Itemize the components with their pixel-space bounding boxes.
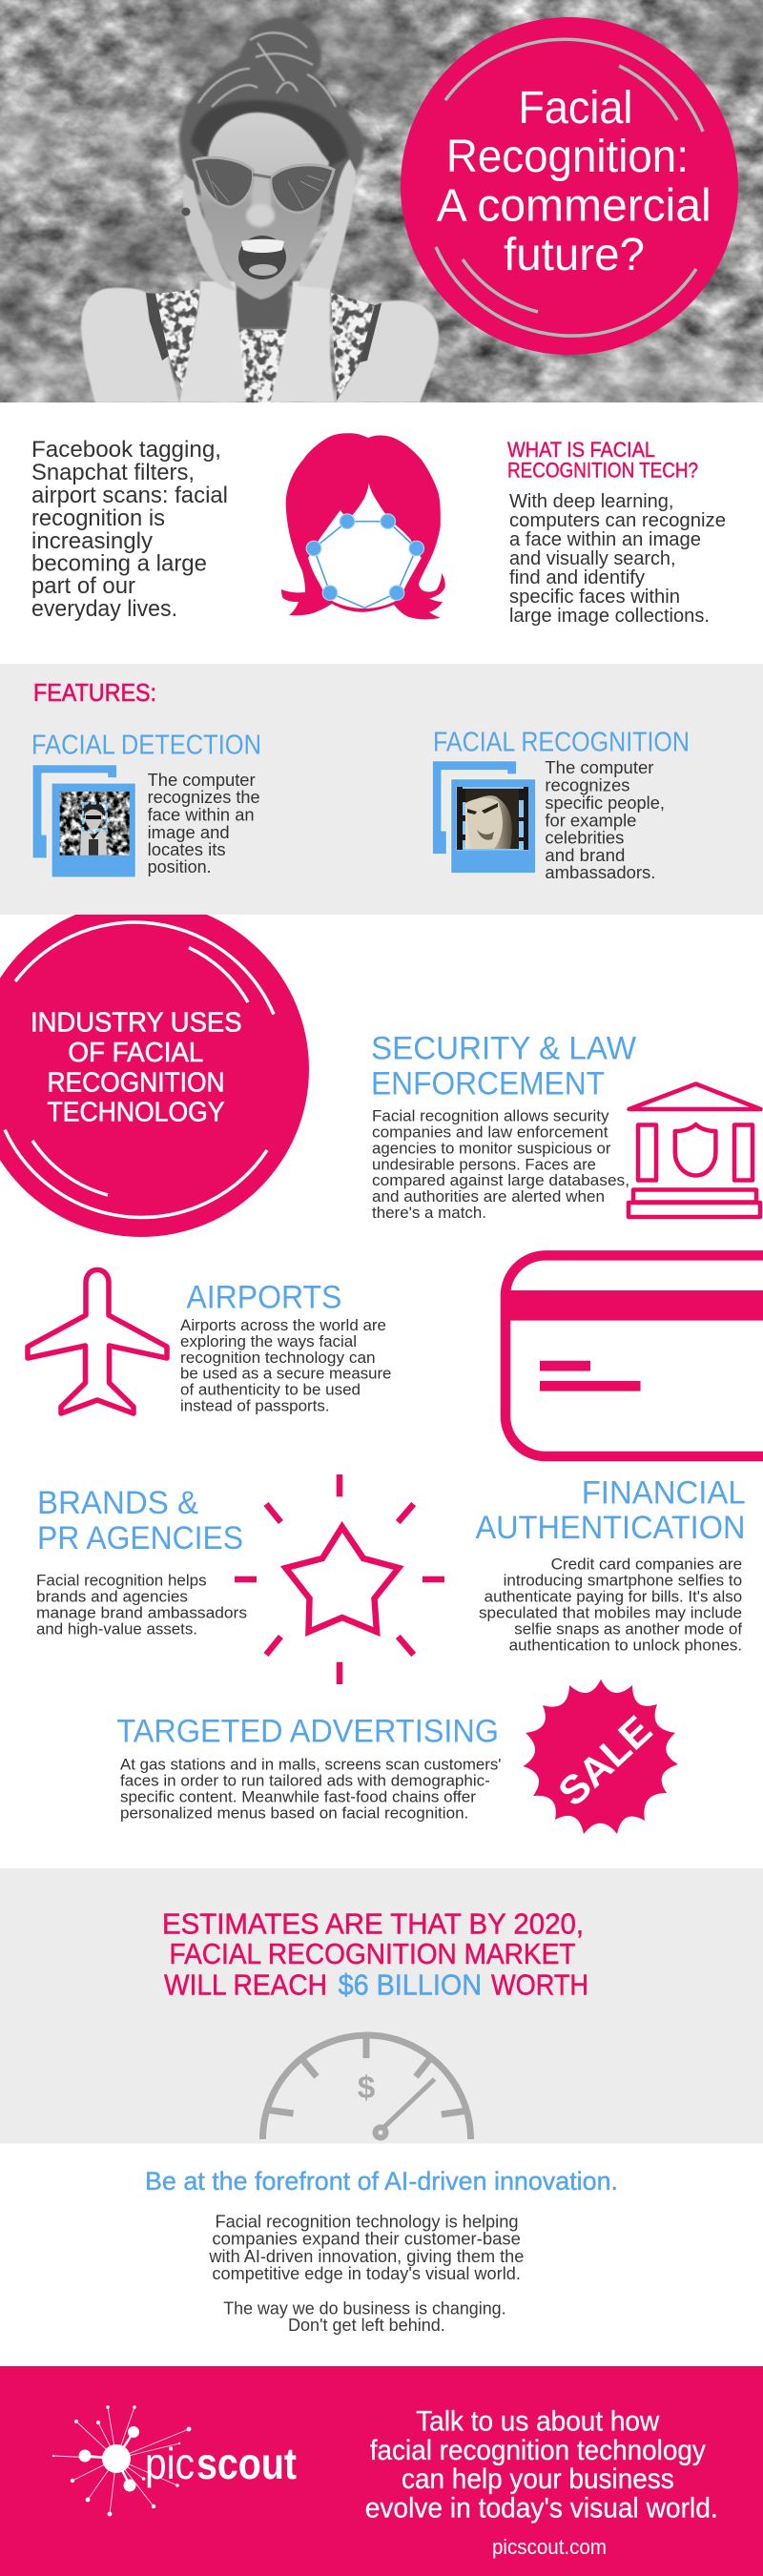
airports text: instead of passports. [180,1397,330,1414]
decorative white arcs [5,922,274,1217]
earring [181,208,191,216]
market estimate heading [162,1907,588,2001]
call to action text [208,2211,524,2335]
icon: government building with shield [629,1083,761,1217]
security and law enforcement heading: SECURITY & LAW [371,1031,636,1067]
logo: picscout [52,2405,297,2516]
intro paragraph: Facebook tagging, [31,437,221,463]
brands text: brands and agencies [36,1589,188,1606]
recognition text: celebrities [545,828,624,847]
hero title circle [401,17,738,355]
what is facial recognition text [509,491,726,627]
market estimate heading: ESTIMATES ARE THAT BY 2020, [162,1907,584,1941]
detection text: face within an [148,805,255,824]
what is facial recognition heading: RECOGNITION TECH? [507,458,698,483]
market estimate heading: $6 BILLION [339,1968,482,2001]
what is facial recognition text: With deep learning, [509,491,673,512]
security text: Facial recognition allows security [372,1108,609,1125]
market estimate heading: WORTH [491,1968,588,2001]
icon: detection photo frames [32,765,135,877]
security text: there's a match. [372,1205,486,1222]
targeted advertising text: faces in order to run tailored ads with demographic- [120,1773,490,1790]
financial text: authenticate paying for bills. It's also [485,1589,742,1606]
film strip sides [457,787,528,850]
what is facial recognition text: large image collections. [509,606,710,627]
nose and mouth [238,179,286,279]
logo: picscout: pic [145,2439,195,2488]
financial authentication heading: AUTHENTICATION [475,1510,746,1546]
icon: hair and face with detection points [281,433,445,619]
icon: dollar gauge [263,2035,471,2139]
recognition text: for example [545,811,636,830]
airports text: of authenticity to be used [180,1381,361,1398]
market estimate heading: FACIAL RECOGNITION MARKET [170,1937,576,1970]
recognition text: recognizes [545,776,629,795]
what is facial recognition heading [507,438,698,483]
targeted advertising text [120,1757,502,1822]
title: A commercial [437,181,711,231]
recognition text: ambassadors. [545,863,655,882]
recognition text: and brand [545,846,625,865]
what is facial recognition text: specific faces within [509,587,680,608]
title [437,83,711,280]
footer call to action: Talk to us about how [416,2406,659,2438]
dress pattern [155,289,375,402]
forearms [179,281,335,402]
features heading: FEATURES: [33,678,156,707]
hands [183,159,356,291]
icon: star with rays [235,1474,444,1684]
detection text: locates its [148,840,226,859]
financial text: Credit card companies are [551,1556,742,1574]
icon: sale burst [523,1680,678,1834]
footer call to action: facial recognition technology [370,2435,706,2466]
detection text: image and [148,823,230,842]
industry uses heading: OF FACIAL [68,1038,203,1068]
footer call to action: can help your business [402,2463,674,2495]
call to action text: Facial recognition technology is helping [216,2211,519,2232]
targeted advertising heading: TARGETED ADVERTISING [116,1714,499,1750]
title: Facial [518,83,632,134]
title: future? [504,230,645,280]
airports heading: AIRPORTS [186,1279,341,1315]
security text [372,1108,629,1222]
industry uses circle [0,901,309,1237]
intro paragraph: everyday lives. [31,596,177,622]
detection text: The computer [148,771,256,790]
industry uses heading: TECHNOLOGY [48,1098,225,1128]
brands and pr agencies heading: PR AGENCIES [37,1520,243,1556]
recognition text: The computer [545,758,653,777]
dress straps [146,293,382,362]
financial text [479,1556,743,1654]
airports text: recognition technology can [180,1350,376,1367]
icon: airplane [28,1270,167,1413]
call to action text: with AI-driven innovation, giving them the [208,2246,524,2266]
neck shadow [236,286,289,329]
icon: credit card [501,1255,763,1456]
footer call to action [365,2406,718,2524]
detection text [148,771,260,876]
intro paragraph: part of our [31,573,135,599]
icon: dollar gauge: $ [358,2070,375,2105]
security text: companies and law enforcement [372,1123,608,1141]
call to action text: competitive edge in today's visual world. [212,2263,521,2283]
brands text [36,1573,247,1638]
financial text: selfie snaps as another mode of [514,1620,743,1638]
industry uses heading: INDUSTRY USES [31,1007,242,1038]
facial detection heading: FACIAL DETECTION [31,731,261,761]
targeted advertising text: personalized menus based on facial recognition. [120,1804,468,1822]
hero photo: woman with sunglasses against grey wall [0,0,763,405]
security text: and authorities are alerted when [372,1188,605,1206]
recognition text [545,758,665,882]
panel: footer [0,2366,763,2576]
decorative ring arcs [436,39,703,336]
intro paragraph [31,437,228,622]
brands text: manage brand ambassadors [36,1605,247,1622]
airports text: exploring the ways facial [180,1333,357,1350]
detection text: position. [148,857,212,876]
panel: market estimate [0,1868,763,2144]
intro paragraph: recognition is [31,505,165,531]
upper arms and shoulders [81,288,439,402]
targeted advertising text: specific content. Meanwhile fast-food chains offer [120,1788,477,1805]
security text: compared against large databases, [372,1172,629,1189]
airports text: Airports across the world are [180,1317,386,1334]
intro paragraph: Snapchat filters, [31,460,195,485]
industry uses heading [31,1007,242,1128]
what is facial recognition text: and visually search, [509,548,675,569]
targeted advertising text: At gas stations and in malls, screens scan customers' [120,1757,502,1774]
logo: picscout: scout [196,2439,297,2488]
portrait of a man [465,789,519,849]
financial authentication heading [475,1475,746,1546]
intro paragraph: increasingly [31,528,153,554]
financial text: authentication to unlock phones. [509,1637,742,1654]
call to action heading: Be at the forefront of AI-driven innovation. [145,2167,618,2195]
what is facial recognition text: a face within an image [509,529,701,550]
financial authentication heading: FINANCIAL [582,1475,746,1512]
brands text: and high-value assets. [36,1620,197,1638]
security and law enforcement heading: ENFORCEMENT [371,1066,605,1103]
what is facial recognition heading: WHAT IS FACIAL [507,438,655,462]
what is facial recognition text: find and identify [509,567,645,588]
call to action text: The way we do business is changing. [223,2298,506,2318]
footer call to action: evolve in today's visual world. [365,2493,718,2524]
call to action text: Don't get left behind. [288,2315,445,2335]
title: Recognition: [446,132,689,182]
security text: agencies to monitor suspicious or [372,1141,611,1158]
industry uses heading: RECOGNITION [48,1067,225,1098]
market estimate heading: WILL REACH [164,1968,327,2001]
brands and pr agencies heading: BRANDS & [37,1485,198,1521]
brands text: Facial recognition helps [36,1573,207,1590]
brands and pr agencies heading [37,1485,243,1556]
security text: undesirable persons. Faces are [372,1156,596,1173]
icon: sale burst: SALE [549,1707,660,1815]
facial recognition heading: FACIAL RECOGNITION [433,727,690,757]
face [196,113,329,299]
airports text [180,1317,391,1414]
call to action text: companies expand their customer-base [212,2229,521,2249]
sunglasses [194,157,334,213]
recognition text: specific people, [545,793,665,813]
website: picscout.com [492,2535,607,2559]
airports text: be used as a secure measure [180,1366,391,1383]
icon: recognition photo frames [432,761,536,874]
detection text: recognizes the [148,788,260,807]
intro paragraph: airport scans: facial [31,483,228,508]
what is facial recognition text: computers can recognize [509,510,726,531]
intro paragraph: becoming a large [31,551,207,576]
financial text: introducing smartphone selfies to [504,1573,742,1590]
financial text: speculated that mobiles may include [479,1604,742,1621]
hair and bun [179,17,382,196]
security and law enforcement heading [371,1031,636,1103]
panel: features [0,664,763,915]
